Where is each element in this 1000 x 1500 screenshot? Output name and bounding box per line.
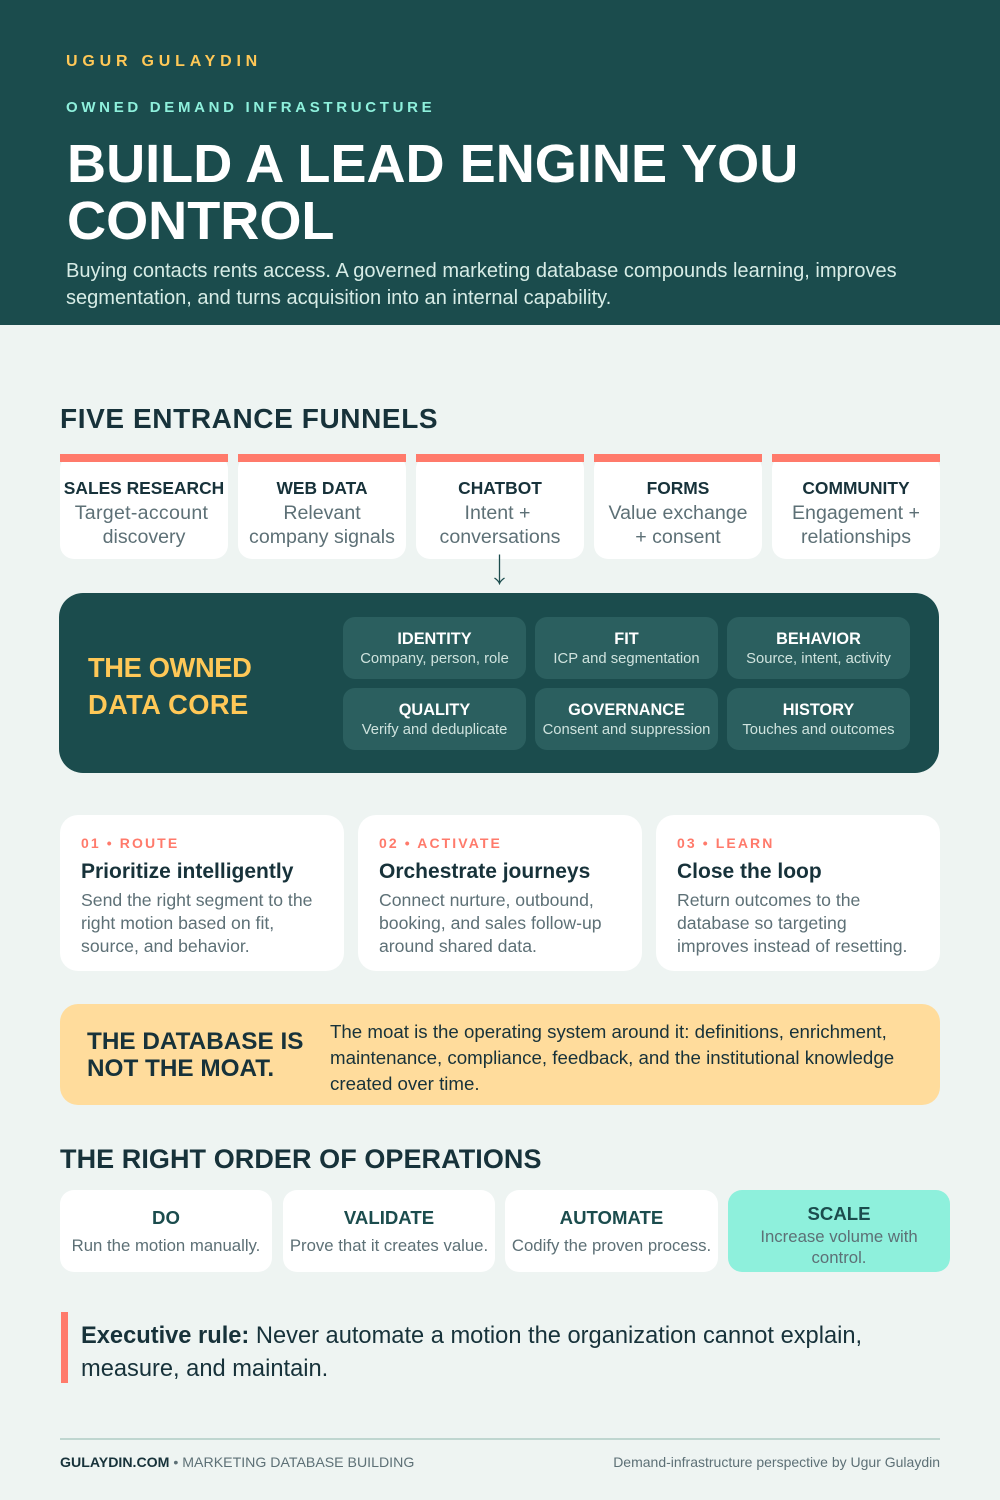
cell: behavior: BEHAVIOR [776,630,861,648]
funnel card: forms: Value exchange [608,502,748,524]
card: route: Prioritize intelligently [81,860,293,883]
card: activate: 02 • ACTIVATE [379,835,502,851]
card: learn: database so targeting [677,913,847,933]
heading: five entrance funnels: FIVE ENTRANCE FUNNELS [60,403,438,434]
cell: history [727,688,910,750]
footer left: GULAYDIN.COM • MARKETING DATABASE BUILDING [60,1454,414,1470]
funnel card: community: COMMUNITY [802,478,910,498]
card: activate: Orchestrate journeys [379,860,590,883]
card: learn: Close the loop [677,860,822,883]
funnel card: web data: Relevant [283,502,361,524]
step: scale [728,1190,950,1272]
cell: history: Touches and outcomes [742,722,895,738]
callout heading [87,1028,303,1082]
step: automate: AUTOMATE [560,1206,663,1228]
step: automate: Codify the proven process. [512,1236,711,1255]
card: route: source, and behavior. [81,936,250,956]
callout heading: NOT THE MOAT. [87,1055,274,1082]
title [67,134,798,251]
data core heading: THE OWNED [88,652,251,683]
card: learn [656,815,940,971]
cell: fit: FIT [614,630,639,648]
callout: database is not the moat [60,1004,940,1105]
title: CONTROL [67,191,334,251]
data core heading [88,652,251,720]
card: route [60,815,344,971]
step: validate: Prove that it creates value. [290,1236,488,1255]
step: do [60,1190,272,1272]
funnel card: community [772,454,940,559]
subtitle: Buying contacts rents access. A governed marketing database compounds learning, improves [66,260,897,282]
funnel card: sales research: discovery [103,526,185,548]
funnel card: forms [594,454,762,559]
cell: history: HISTORY [783,701,854,719]
card: activate: booking, and sales follow-up [379,913,602,933]
step: do: Run the motion manually. [72,1236,260,1255]
funnel card: sales research: Target-account [75,502,208,524]
cell: quality: QUALITY [399,701,470,719]
funnel card: chatbot [416,454,584,559]
funnel card: community: Engagement + [792,502,920,524]
funnel card: web data [238,454,406,559]
cell: governance [535,688,718,750]
funnel card: sales research [60,454,228,559]
eyebrow: OWNED DEMAND INFRASTRUCTURE [66,99,435,116]
cell: governance: GOVERNANCE [568,701,685,719]
executive rule [61,1312,861,1383]
cell: behavior [727,617,910,679]
heading: order of operations: THE RIGHT ORDER OF OPERATIONS [60,1144,542,1174]
cell: quality [343,688,526,750]
footer right: Demand-infrastructure perspective by Ugur Gulaydin [613,1454,940,1470]
header band [0,0,1000,325]
data core heading: DATA CORE [88,688,249,720]
funnel card: web data: WEB DATA [276,478,368,498]
callout text: created over time. [330,1073,480,1094]
card: activate: around shared data. [379,936,537,956]
rule text [81,1323,862,1382]
card: activate [358,815,642,971]
step: scale: SCALE [807,1203,871,1224]
cell: governance: Consent and suppression [543,722,710,738]
card: route: right motion based on fit, [81,913,274,933]
step: automate [505,1190,718,1272]
panel: owned data core [59,593,939,773]
card: learn: improves instead of resetting. [677,936,907,956]
author name: UGUR GULAYDIN [66,53,262,70]
funnel card: chatbot: CHATBOT [458,478,542,498]
cell: identity: IDENTITY [397,630,472,648]
card: activate: Connect nurture, outbound, [379,890,594,910]
cell: quality: Verify and deduplicate [362,722,507,738]
step: validate: VALIDATE [344,1206,434,1228]
callout text: maintenance, compliance, feedback, and the institutional knowledge [330,1047,894,1068]
step: scale: control. [812,1248,866,1267]
callout text: The moat is the operating system around it: definitions, enrichment, [330,1021,887,1042]
card: learn: Return outcomes to the [677,890,860,910]
arrow: funnels to data core [494,554,505,585]
rule text: measure, and maintain. [81,1356,328,1382]
funnel card: chatbot: conversations [440,526,560,548]
footer [60,1438,940,1478]
cell: identity: Company, person, role [360,650,509,666]
funnel card: community: relationships [801,526,911,548]
cell: fit [535,617,718,679]
subtitle [66,260,897,309]
funnel card: chatbot: Intent + [465,502,530,524]
step: do: DO [152,1206,180,1228]
subtitle: segmentation, and turns acquisition into an internal capability. [66,287,611,309]
callout heading: THE DATABASE IS [87,1028,303,1055]
funnel card: web data: company signals [249,526,395,548]
funnel card: forms: + consent [635,526,721,548]
cell: behavior: Source, intent, activity [746,650,891,666]
cell: identity [343,617,526,679]
title: BUILD A LEAD ENGINE YOU [67,134,798,194]
callout text [330,1021,894,1094]
cell: fit: ICP and segmentation [553,650,700,666]
card: route: 01 • ROUTE [81,835,179,851]
card: learn: 03 • LEARN [677,835,774,851]
funnel card: forms: FORMS [647,478,709,498]
rule text: Executive rule: Never automate a motion the organization cannot explain, [81,1323,862,1349]
funnel card: sales research: SALES RESEARCH [64,478,224,498]
card: route: Send the right segment to the [81,890,312,910]
step: scale: Increase volume with [760,1227,918,1246]
step: validate [283,1190,495,1272]
